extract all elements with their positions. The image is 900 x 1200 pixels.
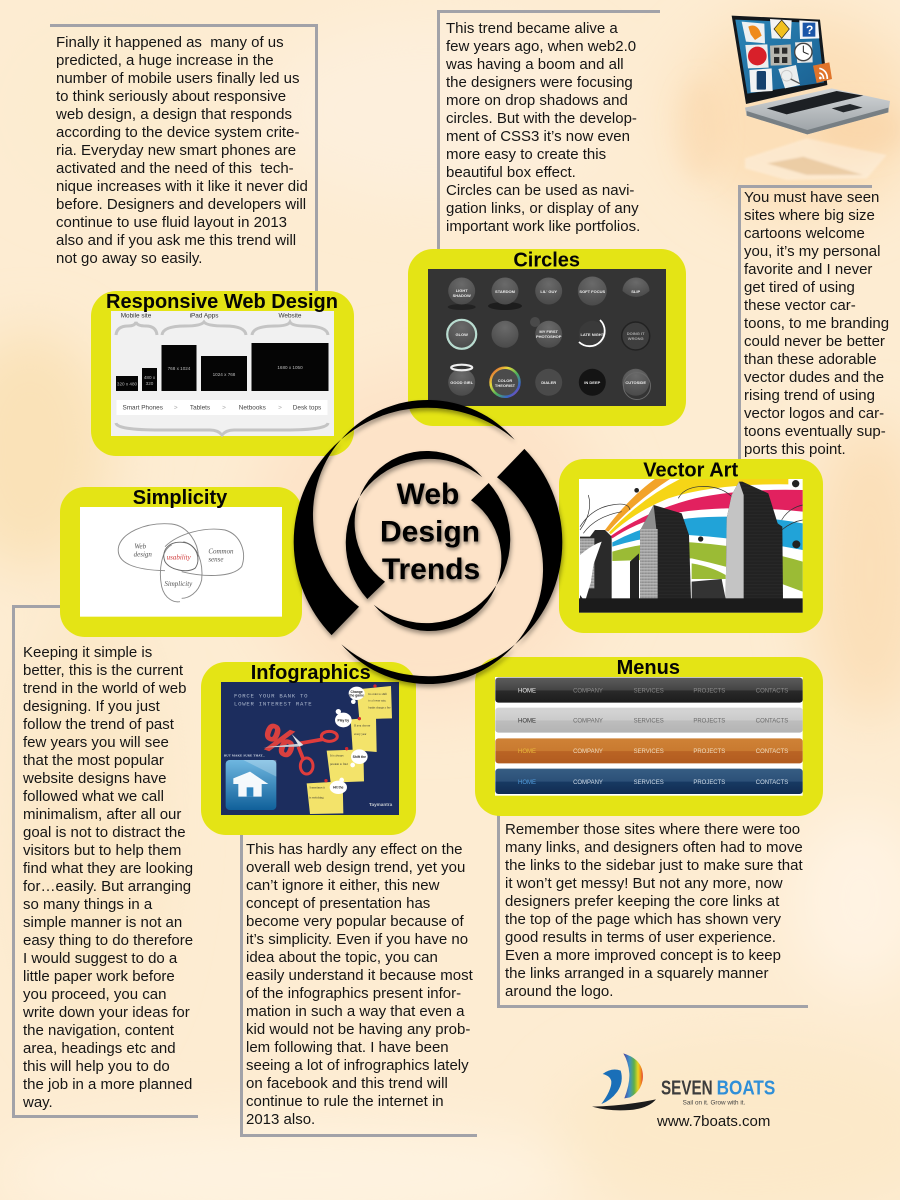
text block: infographics: it’s simplicity. Even if you have no — [246, 931, 468, 948]
text block: infographics: This has hardly any effect on the — [246, 841, 463, 858]
title: Web Design Trends: Trends — [382, 553, 480, 586]
text block: vector art: get tired of using — [744, 279, 855, 296]
text block: vector art: vector dudes and the — [744, 369, 884, 386]
image: device size diagram: 1024 x 768 — [213, 372, 236, 377]
image: circle button samples — [428, 269, 666, 406]
text block: vector art: favorite and I never — [744, 261, 872, 278]
image: device size diagram: 768 x 1024 — [168, 366, 191, 371]
image: device size diagram: Netbooks — [239, 404, 266, 412]
text block: simplicity: write down your ideas for — [23, 1004, 190, 1021]
text block: vector art: toons, to me branding — [744, 315, 889, 332]
text block: infographics: easily understand it because most — [246, 967, 473, 984]
text block: vector art: these vector car- — [744, 297, 856, 314]
text block: simplicity: trend in the world of web — [23, 680, 186, 697]
heading: Circles: Circles — [513, 250, 580, 272]
image: hand-drawn venn diagram: sense — [208, 556, 223, 564]
image: device size diagram: > — [174, 404, 178, 412]
text block: simplicity: this will help you to do — [23, 1058, 170, 1075]
text block: responsive web design: web design, a design that responds — [56, 106, 292, 123]
text block: vector art: than these adorable — [744, 351, 877, 368]
text block: simplicity: way. — [23, 1094, 53, 1111]
text block: vector art — [744, 189, 889, 458]
text block: circles: important work like portfolios. — [446, 218, 640, 235]
text block: simplicity: simple manner is not an — [23, 914, 182, 931]
text block: responsive web design: number of mobile users finally led us — [56, 70, 299, 87]
text block: infographics: overall web design trend, yet you — [246, 859, 465, 876]
text block: simplicity: better, this is the current — [23, 662, 183, 679]
text block: simplicity: website designs have — [23, 770, 166, 787]
text block: vector art: you, it’s my personal — [744, 243, 880, 260]
image: interest rate infographic: Change — [351, 690, 363, 694]
image: interest rate infographic: LOWER INTEREST RATE — [234, 700, 312, 707]
text block: responsive web design: not go away so easily. — [56, 250, 202, 267]
text block: infographics: on facebook and this trend will — [246, 1075, 448, 1092]
text block: infographics: seeing a lot of infrographics lately — [246, 1057, 469, 1074]
image: circle button samples: GLOW — [455, 332, 468, 337]
image: interest rate infographic: Taymantra — [369, 802, 393, 807]
text block: responsive web design: Finally it happened as many of us — [56, 34, 284, 51]
text block: menus: around the logo. — [505, 983, 613, 1000]
text block: simplicity: followed what we call — [23, 788, 164, 805]
title: Web Design Trends: Web — [397, 478, 459, 511]
image: interest rate infographic — [221, 682, 399, 815]
image: device size diagram — [111, 311, 334, 436]
text block: infographics: mation in such a way that even a — [246, 1003, 464, 1020]
image: interest rate infographic: to a lower rate, — [368, 699, 386, 704]
panel: Responsive Web Design — [91, 291, 354, 456]
text block: simplicity: visitors but to help them — [23, 842, 181, 859]
text block: responsive web design: predicted, a huge increase in the — [56, 52, 274, 69]
text block: simplicity: minimalism, after all our — [23, 806, 181, 823]
text block: responsive web design: continue to use fluid layout in 2013 — [56, 214, 287, 231]
text block: circles: Circles can be used as navi- — [446, 182, 634, 199]
image: interest rate infographic: FORCE YOUR BANK TO — [234, 692, 308, 699]
website url: www.7boats.com — [657, 1113, 770, 1130]
image: circle button samples: SOFT FOCUS — [579, 289, 606, 294]
title: Web Design Trends — [380, 478, 480, 586]
image: device size diagram: 320 x 480 — [117, 382, 138, 386]
panel: Circles — [408, 249, 686, 426]
text block: circles: more easy to create this — [446, 146, 606, 163]
text block: vector art: You must have seen — [744, 189, 879, 206]
text block: infographics: idea about the topic, you can — [246, 949, 438, 966]
image: navigation bar samples: COMPANY — [573, 749, 603, 755]
image: circle button samples: CUTOSIDE — [625, 380, 646, 385]
text block: simplicity: follow the trend of past — [23, 716, 174, 733]
title: Web Design Trends: Design — [380, 516, 480, 549]
heading: Infographics: Infographics — [251, 662, 371, 684]
text block: infographics: continue to rule the internet in — [246, 1093, 444, 1110]
text block: vector art: sites where big size — [744, 207, 875, 224]
text block: simplicity: designing. If you just — [23, 698, 160, 715]
image: city skyline with colour stripes — [579, 479, 803, 613]
image: navigation bar samples: SERVICES — [634, 749, 664, 755]
text block: simplicity: the job in a more planned — [23, 1076, 192, 1093]
text block: vector art: could never be better — [744, 333, 885, 350]
text block: menus: good results in terms of user experience. — [505, 929, 776, 946]
image: interest rate infographic: every year — [354, 732, 367, 736]
image: interest rate infographic: It is always — [330, 754, 344, 758]
text block: responsive web design: to think seriously about responsive — [56, 88, 286, 105]
text block: circles — [446, 20, 640, 235]
text block: vector art: toons eventually sup- — [744, 423, 886, 440]
text block: menus: many links, and designers often had to move — [505, 839, 803, 856]
image: device size diagram: Mobile site — [121, 312, 152, 320]
image: circle button samples: DIALER — [541, 380, 556, 385]
image: circle button samples: LIGHT — [456, 288, 468, 293]
image: navigation bar samples: CONTACTS — [756, 689, 788, 695]
image: device size diagram: Smart Phones — [122, 404, 163, 412]
text block: responsive web design: before. Designers and developers will — [56, 196, 306, 213]
image: device size diagram: 1680 x 1050 — [277, 365, 303, 370]
text block: circles: more on drop shadows and — [446, 92, 628, 109]
image: circle button samples: SHADOW — [453, 293, 471, 298]
wordmark: SEVEN — [661, 1078, 713, 1100]
image: navigation bar samples: SERVICES — [634, 719, 664, 725]
text block: infographics: kid would not be having any prob- — [246, 1021, 470, 1038]
text block: simplicity: Keeping it simple is — [23, 644, 152, 661]
text block: circles: the designers were focusing — [446, 74, 633, 91]
icon: blue sail — [601, 1070, 622, 1104]
text block: infographics: 2013 also. — [246, 1111, 315, 1128]
text block: simplicity: for…easily. But arranging — [23, 878, 191, 895]
image: device size diagram: Tablets — [190, 404, 210, 412]
text block: circles: ment of CSS3 it’s now even — [446, 128, 630, 145]
image: circle button samples: DOING IT — [627, 331, 645, 336]
icon: rainbow sail — [623, 1053, 643, 1098]
text block: menus: the top of the page which has shown very — [505, 911, 781, 928]
image: device size diagram: Desk tops — [293, 404, 321, 412]
text block: menus: the links arranged in a squarely manner — [505, 965, 768, 982]
text block: simplicity: little paper work before — [23, 968, 175, 985]
text block: menus: the links to the sidebar just to make sure that — [505, 857, 803, 874]
image: hand-drawn venn diagram: Common — [208, 547, 234, 555]
text block: infographics: of the infographics present infor- — [246, 985, 461, 1002]
image: navigation bar samples: HOME — [518, 719, 536, 725]
text block: infographics: concept of presentation has — [246, 895, 430, 912]
text block: simplicity — [23, 644, 193, 1111]
text block: vector art: vector logos and car- — [744, 405, 884, 422]
image: interest rate infographic: banks charge a fee — [368, 705, 391, 709]
text block: circles: gation links, or display of any — [446, 200, 639, 217]
image: navigation bar samples: PROJECTS — [693, 780, 725, 786]
heading: Vector Art: Vector Art — [643, 460, 738, 482]
image: device size diagram: iPad Apps — [190, 312, 218, 320]
text block: responsive web design: also and if you ask me this trend will — [56, 232, 296, 249]
image: navigation bar samples — [495, 677, 803, 796]
icon: hull — [592, 1099, 656, 1110]
panel: Vector Art — [559, 459, 823, 633]
image: interest rate infographic: Shift the — [353, 755, 366, 759]
panel: Simplicity — [60, 487, 302, 637]
image: navigation bar samples: HOME — [518, 780, 536, 786]
image: hand-drawn venn diagram: usability — [167, 553, 192, 561]
image: circle button samples: MY FIRST — [539, 329, 559, 334]
image: navigation bar samples: SERVICES — [634, 689, 664, 695]
text block: responsive web design: nique increases with it like it never did — [56, 178, 308, 195]
image: navigation bar samples: COMPANY — [573, 689, 603, 695]
wordmark — [661, 1078, 775, 1100]
image: interest rate infographic: Sometimes it — [309, 785, 325, 789]
text block: infographics — [246, 841, 473, 1128]
text block: vector art: rising trend of using — [744, 387, 875, 404]
image: circle button samples: IN DEEP — [584, 380, 601, 385]
image: circle button samples: COLOR — [498, 378, 512, 383]
image: device size diagram: > — [278, 404, 282, 412]
image: circle button samples: LIL' GUY — [540, 289, 557, 294]
text block: simplicity: find what they are looking — [23, 860, 193, 877]
image: navigation bar samples: PROJECTS — [693, 719, 725, 725]
image: circle button samples: LATE NIGHT — [580, 332, 605, 337]
text block: menus: it won’t get messy! But not any more, now — [505, 875, 783, 892]
image: interest rate infographic: BUT MAKE SURE THAT... — [224, 754, 265, 758]
text block: responsive web design: activated and the need of this tech- — [56, 160, 294, 177]
image: hand-drawn venn diagram: Simplicity — [164, 580, 193, 588]
text block: simplicity: you proceed, you can — [23, 986, 166, 1003]
heading: Simplicity: Simplicity — [133, 487, 228, 509]
text block: menus: designers prefer keeping the core links at — [505, 893, 779, 910]
image: interest rate infographic: prudent to find — [330, 762, 348, 766]
image: device size diagram: > — [222, 404, 226, 412]
image: circle button samples: PHOTOSHOP — [536, 334, 562, 339]
image: interest rate infographic: the game — [349, 694, 364, 698]
text block: circles: circles. But with the develop- — [446, 110, 637, 127]
text block: infographics: can’t ignore it either, this new — [246, 877, 439, 894]
text block: circles: beautiful box effect. — [446, 164, 576, 181]
image: interest rate infographic: If you choose — [354, 724, 371, 728]
image: navigation bar samples: COMPANY — [573, 719, 603, 725]
image: navigation bar samples: HOME — [518, 749, 536, 755]
text block: simplicity: so many things in a — [23, 896, 152, 913]
image: circle button samples: STARDOM — [495, 289, 516, 294]
text block: responsive web design: ria. Everyday new smart phones are — [56, 142, 296, 159]
image: interest rate infographic: Hit the — [333, 786, 344, 790]
image: navigation bar samples: HOME — [518, 689, 536, 695]
text block: responsive web design: according to the device system crite- — [56, 124, 299, 141]
text block: simplicity: the navigation, content — [23, 1022, 174, 1039]
panel: Menus — [475, 657, 823, 816]
logo: Seven Boats — [592, 1053, 775, 1110]
heading: Responsive Web Design: Responsive Web Design — [106, 291, 338, 313]
image: navigation bar samples: CONTACTS — [756, 780, 788, 786]
image: interest rate infographic: Play by — [338, 718, 349, 722]
panel: Infographics — [201, 662, 416, 835]
image: interest rate infographic: % — [257, 715, 302, 766]
image: navigation bar samples: PROJECTS — [693, 689, 725, 695]
text block: menus: Remember those sites where there were too — [505, 821, 800, 838]
image: circle button samples: GOOD GIRL — [450, 380, 474, 385]
icon: laptop with app tiles — [732, 16, 890, 180]
image: circle button samples: WRONG — [628, 336, 644, 341]
image: hand-drawn venn diagram: Web — [134, 542, 147, 550]
image: navigation bar samples: CONTACTS — [756, 749, 788, 755]
image: device size diagram: Website — [279, 312, 302, 320]
text block: responsive web design — [56, 34, 308, 267]
icon: laptop with app tiles: ? — [806, 23, 813, 37]
tagline: Sail on it. Grow with it. — [683, 1099, 746, 1106]
image: navigation bar samples: SERVICES — [634, 780, 664, 786]
text block: infographics: lem following that. I have been — [246, 1039, 449, 1056]
text block: simplicity: goal is not to distract the — [23, 824, 186, 841]
image: interest rate infographic: In order to shift — [368, 692, 387, 696]
image: circle button samples: SLIP — [631, 289, 640, 294]
text block: menus — [505, 821, 803, 1000]
text block: simplicity: that the most popular — [23, 752, 164, 769]
text block: infographics: become very popular because of — [246, 913, 464, 930]
image: hand-drawn venn diagram: design — [134, 551, 152, 559]
image: navigation bar samples: COMPANY — [573, 780, 603, 786]
image: navigation bar samples: PROJECTS — [693, 749, 725, 755]
text block: simplicity: I would suggest to do a — [23, 950, 177, 967]
text block: circles: was having a boom and all — [446, 56, 624, 73]
text block: simplicity: easy thing to do therefore — [23, 932, 193, 949]
heading: Menus: Menus — [617, 657, 680, 679]
image: circle button samples: THEORIST — [495, 383, 516, 388]
central emblem: concentric swoosh rings — [294, 400, 562, 684]
image: navigation bar samples: CONTACTS — [756, 719, 788, 725]
text block: vector art: cartoons welcome — [744, 225, 865, 242]
text block: simplicity: few years you will see — [23, 734, 169, 751]
image: device size diagram: 480 x — [144, 375, 156, 380]
text block: vector art: ports this point. — [744, 441, 846, 458]
text block: circles: few years ago, when web2.0 — [446, 38, 636, 55]
text block: circles: This trend became alive a — [446, 20, 618, 37]
text block: simplicity: area, headings etc and — [23, 1040, 176, 1057]
text block: menus: Even a more improved concept is to keep — [505, 947, 781, 964]
image: interest rate infographic: is switching — [309, 795, 324, 799]
wordmark: BOATS — [717, 1078, 775, 1100]
image: device size diagram: 320 — [146, 381, 154, 386]
image: hand-drawn venn diagram — [80, 507, 282, 617]
